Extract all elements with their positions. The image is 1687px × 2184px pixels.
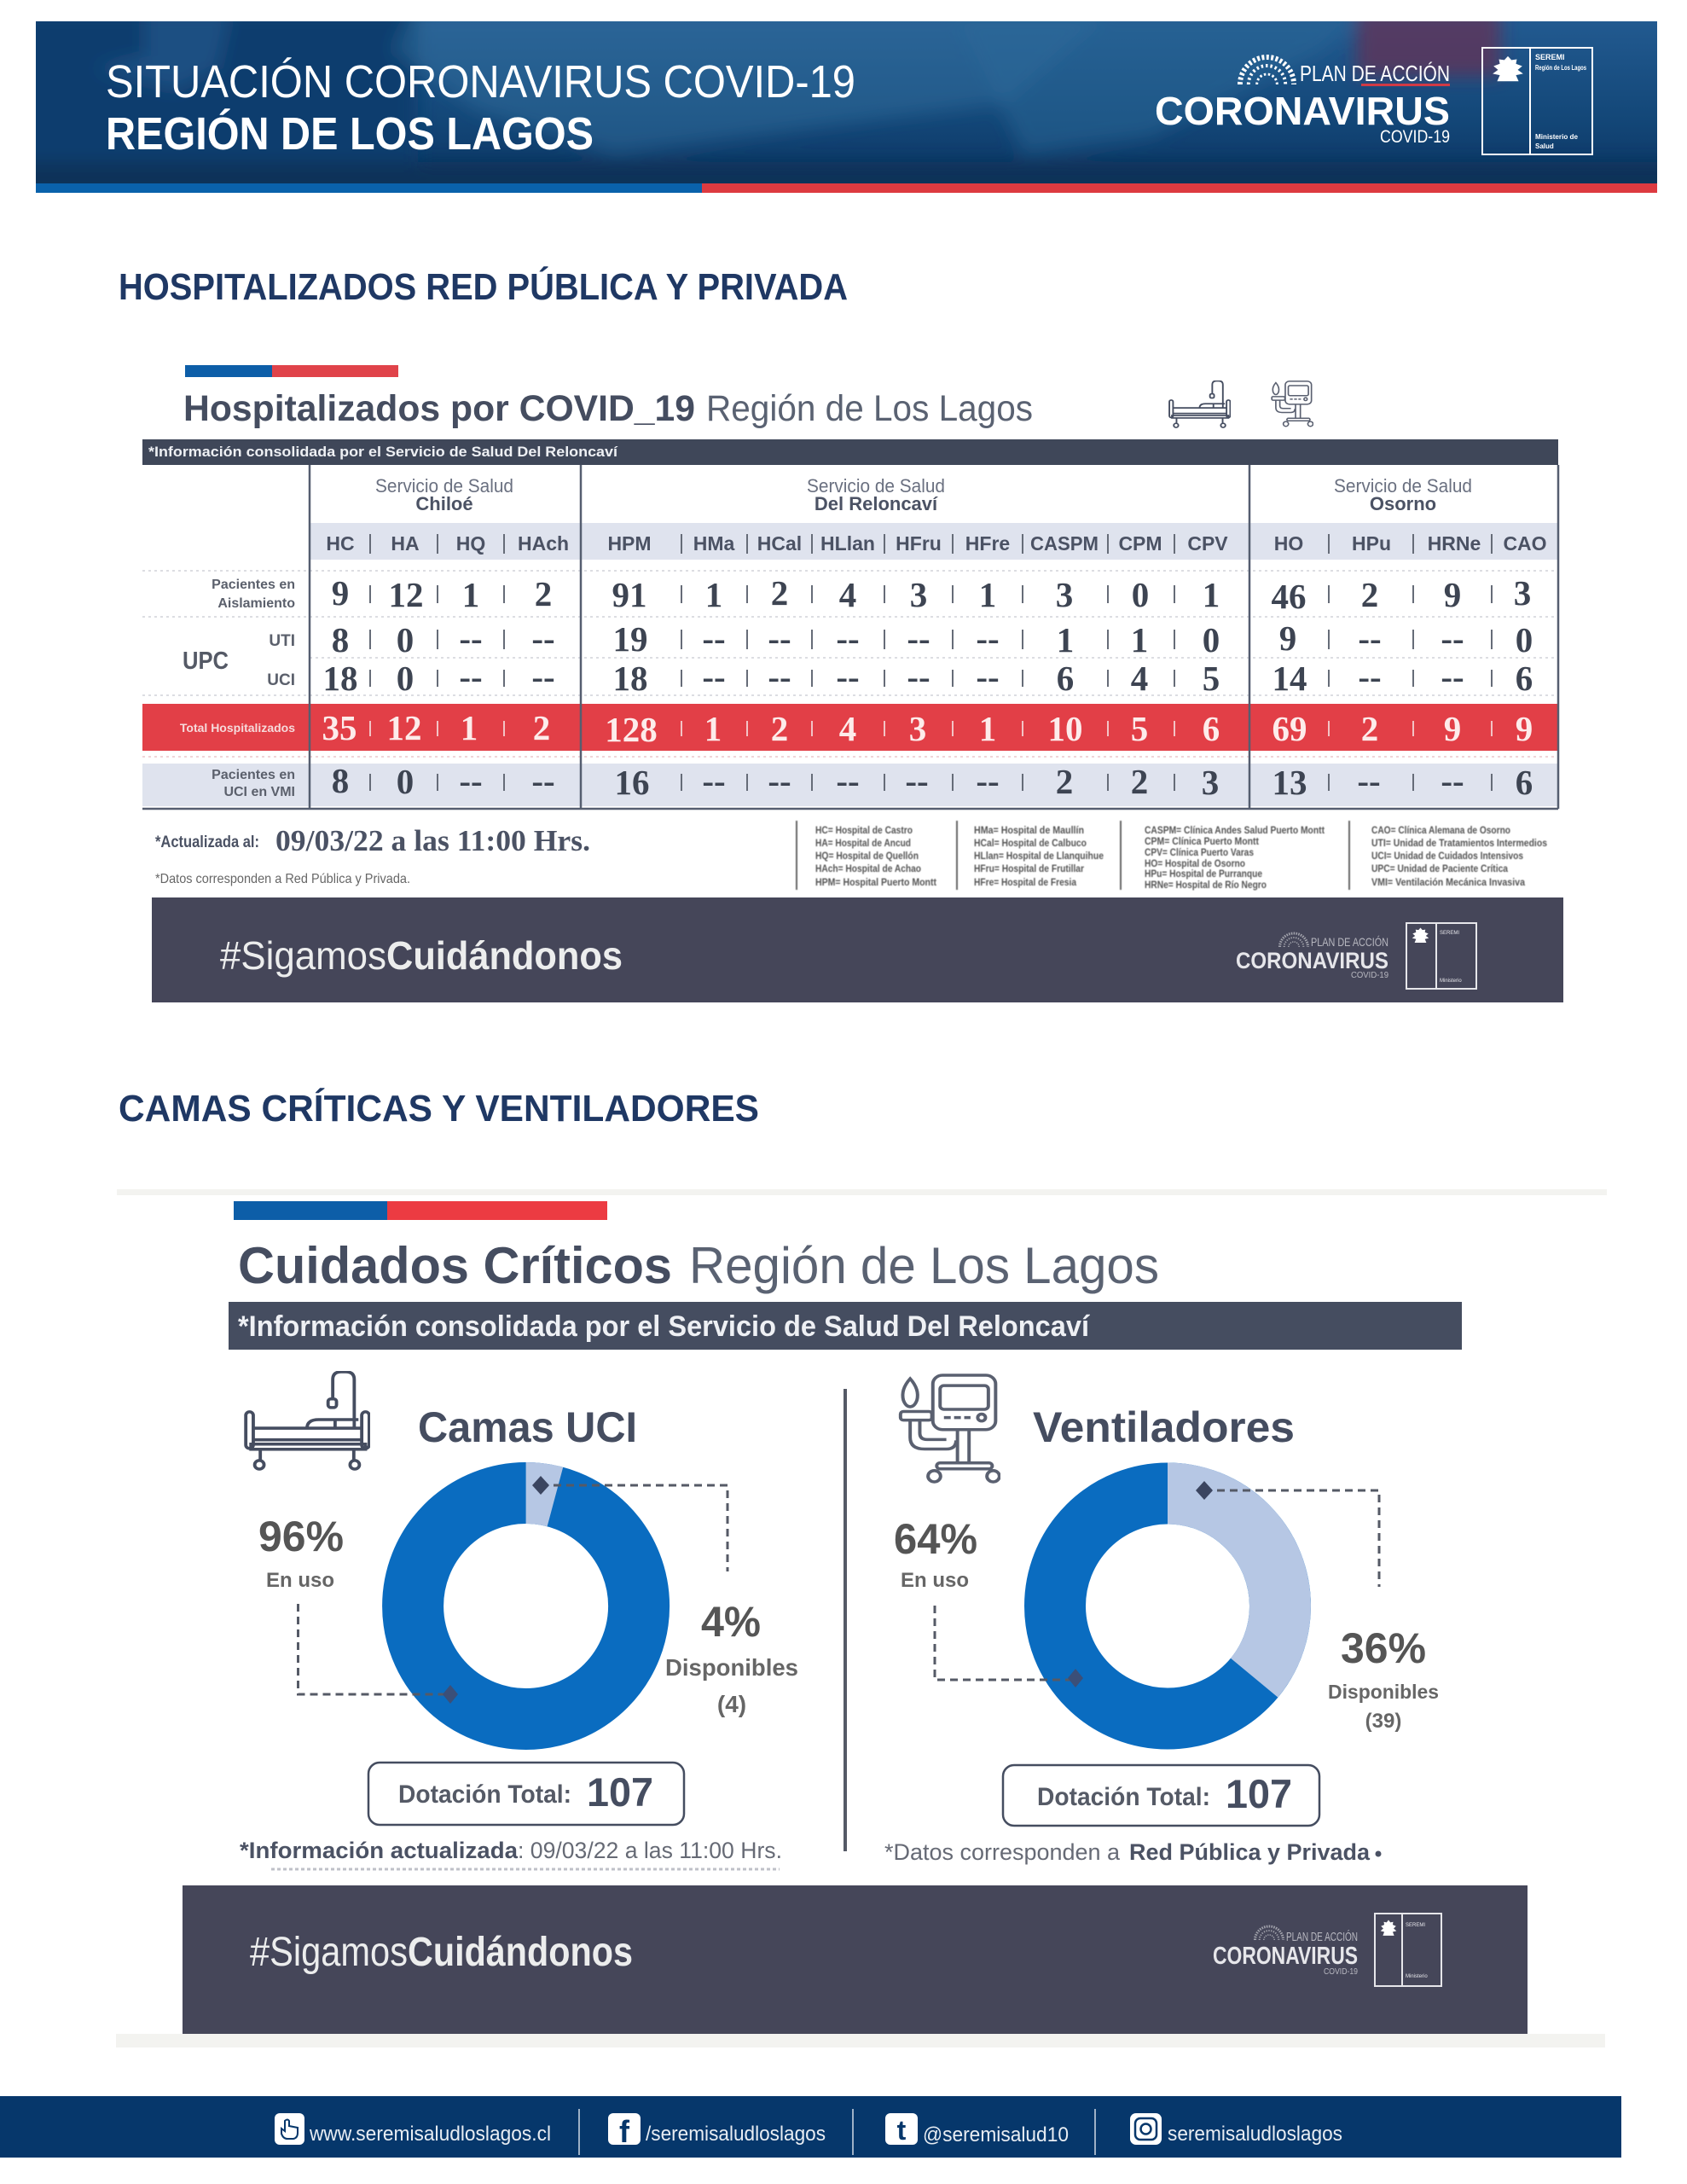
hospital codes	[326, 532, 1547, 555]
update note: *Actualizada al:	[155, 834, 259, 851]
row labels: UCI en VMI	[223, 785, 295, 799]
info bar	[142, 439, 1558, 465]
hashtag banner	[183, 1885, 1528, 2034]
table grid lines	[142, 465, 1558, 809]
row: pacientes en uci en vmi: --	[905, 761, 929, 800]
banner logo: SEREMI	[1406, 1923, 1425, 1928]
hospital codes: CPM	[1118, 532, 1162, 555]
abbreviations legend: HLlan= Hospital de Llanquihue	[974, 850, 1104, 862]
accent stripe	[234, 1201, 607, 1220]
row: pacientes en uci en vmi: --	[459, 761, 483, 800]
total box: 107	[1226, 1771, 1292, 1816]
banner logo: COVID-19	[1324, 1967, 1358, 1977]
banner logo: COVID-19	[1351, 971, 1388, 980]
row: pacientes en aislamiento: 4	[839, 575, 856, 614]
abbreviations legend: HFru= Hospital de Frutillar	[974, 863, 1084, 874]
donut chart: camas uci	[413, 1462, 639, 1719]
row: uti: --	[702, 619, 726, 658]
row: pacientes en aislamiento	[332, 573, 1531, 616]
row: pacientes en aislamiento: 91	[612, 575, 646, 614]
banner logo: Ministerio	[1440, 979, 1462, 984]
row labels: UCI	[267, 671, 295, 689]
callout: en uso: En uso	[901, 1569, 969, 1592]
abbreviations legend: CPV= Clínica Puerto Varas	[1145, 846, 1254, 858]
row: pacientes en uci en vmi: 0	[397, 762, 414, 801]
row: uci: --	[768, 657, 791, 696]
service headers: Del Reloncaví	[815, 493, 938, 514]
row: pacientes en uci en vmi: --	[531, 761, 555, 800]
row: total hospitalizados: 2	[1361, 709, 1378, 748]
row: uti: --	[1358, 619, 1382, 658]
row: uti: 0	[397, 620, 414, 659]
row labels: Aislamiento	[217, 596, 295, 611]
icon: tumblr	[885, 2113, 918, 2146]
row: pacientes en aislamiento: 2	[1361, 575, 1378, 614]
header banner	[36, 21, 1657, 193]
icon: ventilator	[901, 1375, 1000, 1482]
row: pacientes en uci en vmi: 2	[1131, 762, 1148, 801]
panel title	[183, 388, 1033, 429]
row: uci: --	[1358, 657, 1382, 696]
row: total hospitalizados: 1	[461, 708, 478, 747]
icon: instagram	[1130, 2113, 1162, 2145]
row: pacientes en aislamiento: 3	[1056, 575, 1073, 614]
data note: Red Pública y Privada	[1129, 1839, 1371, 1865]
service headers	[375, 475, 1472, 514]
row: total hospitalizados: 5	[1131, 709, 1148, 748]
banner logo: SEREMI	[1440, 931, 1459, 936]
row: pacientes en aislamiento: 1	[1203, 575, 1220, 614]
hospital codes: HA	[391, 532, 420, 555]
tumblr account: @seremisalud10	[923, 2123, 1069, 2146]
update note	[240, 1838, 782, 1863]
heading: ventiladores: Ventiladores	[1033, 1403, 1295, 1451]
abbreviations legend: UTI= Unidad de Tratamientos Intermedios	[1371, 837, 1547, 849]
row: pacientes en aislamiento: 9	[1444, 575, 1461, 614]
row: pacientes en aislamiento: 1	[705, 575, 722, 614]
callout: en uso: 64%	[894, 1515, 977, 1563]
accent stripe	[185, 365, 398, 377]
hashtag banner: Cuidándonos	[408, 1930, 633, 1975]
hospital codes: CPV	[1187, 532, 1228, 555]
info bar	[229, 1302, 1462, 1350]
clipped remnant note line	[271, 1868, 780, 1870]
heading: camas uci: Camas UCI	[418, 1403, 637, 1451]
row: total hospitalizados: 9	[1516, 709, 1533, 748]
row: uci: 6	[1516, 659, 1533, 698]
callout: disponibles: Disponibles	[665, 1654, 798, 1681]
row: total hospitalizados: 4	[839, 709, 856, 748]
service headers: Servicio de Salud	[375, 475, 513, 497]
row labels: UPC	[183, 648, 229, 675]
service headers: Chiloé	[415, 493, 473, 514]
abbreviations legend: HA= Hospital de Ancud	[815, 837, 911, 849]
banner logo: Ministerio	[1406, 1974, 1428, 1979]
row: pacientes en uci en vmi: 3	[1202, 763, 1219, 802]
row: pacientes en aislamiento: 3	[910, 575, 927, 614]
abbreviations legend: HMa= Hospital de Maullín	[974, 824, 1084, 836]
row: uci: 5	[1203, 659, 1220, 698]
banner logo: PLAN DE ACCIÓN	[1286, 1930, 1358, 1944]
data note: *Datos corresponden a	[884, 1839, 1121, 1865]
row: pacientes en aislamiento: 1	[462, 575, 479, 614]
logo: seremi de salud: Ministerio de	[1535, 133, 1579, 141]
logo: plan de acción coronavirus	[1155, 57, 1450, 147]
row: pacientes en aislamiento: 9	[332, 573, 349, 613]
icon: bed	[246, 1372, 369, 1469]
row: pacientes en aislamiento: 46	[1271, 577, 1307, 616]
update note: *Datos corresponden a Red Pública y Privada.	[155, 872, 410, 886]
callout: disponibles: 4%	[701, 1598, 761, 1646]
row: total hospitalizados: 2	[533, 708, 550, 747]
row: uti: --	[1441, 619, 1464, 658]
abbreviations legend: HQ= Hospital de Quellón	[815, 850, 919, 862]
row: uti: --	[531, 619, 555, 658]
hospital codes: HFru	[896, 532, 942, 555]
callout: disponibles	[532, 1476, 798, 1717]
row: pacientes en uci en vmi: 13	[1272, 763, 1307, 802]
header title	[106, 56, 855, 160]
row: uti: --	[459, 619, 483, 658]
hospital codes: HPu	[1352, 532, 1391, 555]
row: uci: --	[836, 657, 860, 696]
hospital codes: HCal	[757, 532, 802, 555]
row: uci: --	[1441, 657, 1464, 696]
row: total hospitalizados: 3	[909, 709, 926, 748]
row: uti: 1	[1131, 620, 1148, 659]
logo: plan de acción coronavirus: PLAN DE ACCIÓN	[1300, 61, 1450, 86]
row: pacientes en aislamiento: 12	[389, 575, 423, 614]
banner logo	[1236, 923, 1476, 989]
section heading: hospitalizados: HOSPITALIZADOS RED PÚBLICA Y PRIVADA	[119, 265, 848, 308]
panel title: Cuidados Críticos	[238, 1237, 672, 1294]
row: pacientes en uci en vmi: --	[1441, 761, 1464, 800]
service headers: Servicio de Salud	[807, 475, 945, 497]
hashtag banner: #Sigamos	[220, 933, 386, 978]
abbreviations legend: HCal= Hospital de Calbuco	[974, 837, 1087, 849]
row: total hospitalizados: 1	[979, 709, 996, 748]
data note	[884, 1839, 1382, 1865]
row: pacientes en uci en vmi: --	[768, 761, 791, 800]
hospital codes: HC	[326, 532, 355, 555]
row: pacientes en uci en vmi: --	[836, 761, 860, 800]
hashtag banner: #Sigamos	[250, 1930, 408, 1975]
icon: facebook	[608, 2113, 641, 2149]
total box: Dotación Total:	[398, 1780, 571, 1809]
row: uti: --	[768, 619, 791, 658]
service headers: Osorno	[1370, 493, 1436, 514]
row: uti: 0	[1516, 620, 1533, 659]
row: uci: --	[459, 657, 483, 696]
icon: web	[275, 2113, 304, 2145]
callout: disponibles: 36%	[1341, 1624, 1426, 1672]
row: total hospitalizados: 69	[1272, 709, 1307, 748]
logo: seremi de salud	[1482, 48, 1592, 154]
hospital codes: HRNe	[1428, 532, 1481, 555]
row: pacientes en uci en vmi: 6	[1516, 763, 1533, 802]
hashtag banner	[152, 897, 1563, 1002]
total box	[368, 1763, 684, 1825]
abbreviations legend: HO= Hospital de Osorno	[1145, 857, 1245, 869]
row: uti: --	[976, 619, 1000, 658]
row: pacientes en aislamiento: 3	[1514, 573, 1531, 613]
row: uti: 9	[1279, 619, 1296, 658]
abbreviations legend	[797, 821, 1547, 891]
abbreviations legend: UCI= Unidad de Cuidados Intensivos	[1371, 850, 1523, 862]
service headers: Servicio de Salud	[1334, 475, 1472, 497]
hospital codes: HO	[1274, 532, 1303, 555]
abbreviations legend: HAch= Hospital de Achao	[815, 863, 921, 874]
row: total hospitalizados: 10	[1047, 709, 1083, 748]
row: pacientes en uci en vmi: --	[1357, 761, 1381, 800]
row: total hospitalizados: 9	[1444, 709, 1461, 748]
row labels: Pacientes en	[212, 578, 295, 592]
hospital codes: HAch	[518, 532, 569, 555]
row: uti: --	[907, 619, 930, 658]
table background bands	[142, 523, 1558, 806]
row: uti: 8	[332, 620, 349, 659]
row: uti: 19	[612, 619, 648, 659]
row: uti: --	[836, 619, 860, 658]
abbreviations legend: HFre= Hospital de Fresia	[974, 876, 1076, 888]
update note: *Información actualizada	[240, 1838, 519, 1863]
row: pacientes en uci en vmi: --	[976, 761, 1000, 800]
panel: cuidados críticos	[116, 1189, 1607, 2048]
hospital codes: CASPM	[1030, 532, 1099, 555]
row: uci: --	[702, 657, 726, 696]
abbreviations legend: CAO= Clínica Alemana de Osorno	[1371, 824, 1510, 836]
row labels: UTI	[269, 632, 295, 650]
row: uci: --	[976, 657, 1000, 696]
row: pacientes en aislamiento: 0	[1132, 575, 1149, 614]
abbreviations legend: VMI= Ventilación Mecánica Invasiva	[1371, 876, 1525, 888]
column divider	[844, 1389, 847, 1851]
logo: plan de acción coronavirus: CORONAVIRUS	[1155, 89, 1450, 133]
callout: disponibles	[1196, 1481, 1439, 1733]
logo: seremi de salud: Región de Los Lagos	[1535, 64, 1586, 72]
row: pacientes en uci en vmi: --	[702, 761, 726, 800]
abbreviations legend: HPu= Hospital de Purranque	[1145, 868, 1262, 880]
row: uci: 6	[1057, 659, 1074, 698]
panel: hospitalizados por covid	[142, 365, 1563, 1002]
hospital codes: HFre	[965, 532, 1010, 555]
logo: plan de acción coronavirus: COVID-19	[1380, 127, 1450, 147]
hospital codes: CAO	[1503, 532, 1547, 555]
callout: en uso	[258, 1513, 458, 1704]
row: uti	[332, 619, 1533, 659]
row: total hospitalizados: 35	[322, 708, 357, 747]
callout: en uso	[894, 1515, 1083, 1687]
footer bar	[0, 2096, 1621, 2158]
callout: disponibles: (4)	[717, 1691, 746, 1717]
logo: seremi de salud: SEREMI	[1535, 53, 1565, 61]
row: total hospitalizados: 12	[387, 708, 421, 747]
row: uci	[322, 657, 1533, 698]
row: uci: 0	[397, 659, 414, 698]
row: pacientes en uci en vmi: 16	[614, 763, 650, 802]
banner logo: PLAN DE ACCIÓN	[1311, 935, 1388, 949]
row: total hospitalizados: 128	[605, 710, 658, 749]
callout: en uso: En uso	[266, 1569, 334, 1592]
banner logo: CORONAVIRUS	[1213, 1943, 1358, 1970]
row: pacientes en uci en vmi	[332, 761, 1533, 802]
panel title: Región de Los Lagos	[689, 1237, 1159, 1294]
row: pacientes en aislamiento: 1	[979, 575, 996, 614]
row: uci: --	[531, 657, 555, 696]
callout: disponibles: (39)	[1365, 1710, 1401, 1733]
row: uti: 1	[1057, 620, 1074, 659]
header red and blue stripe	[36, 183, 1657, 193]
info bar: *Información consolidada por el Servicio de Salud Del Reloncaví	[238, 1310, 1090, 1343]
icon: facebook: f	[619, 2114, 630, 2149]
callout: en uso: 96%	[258, 1513, 344, 1560]
row: total hospitalizados: 2	[771, 709, 788, 748]
row: uci: 14	[1272, 659, 1307, 698]
panel title: Hospitalizados por COVID_19	[183, 388, 695, 429]
row labels	[180, 578, 295, 799]
chart block: camas uci	[240, 1372, 798, 1869]
row labels: Pacientes en	[212, 768, 295, 782]
icon: bed	[1169, 380, 1230, 427]
total box: 107	[587, 1769, 653, 1815]
row: uti: 0	[1203, 620, 1220, 659]
abbreviations legend: HRNe= Hospital de Río Negro	[1145, 879, 1267, 891]
row: uci: 18	[322, 659, 358, 698]
hospital codes: HQ	[456, 532, 485, 555]
abbreviations legend: CPM= Clínica Puerto Montt	[1145, 835, 1259, 847]
row: pacientes en aislamiento: 2	[771, 573, 788, 613]
row: pacientes en uci en vmi: 8	[332, 761, 349, 800]
logo: seremi de salud: Salud	[1535, 142, 1554, 150]
chart block: ventiladores	[884, 1375, 1439, 1865]
hospital codes: HMa	[693, 532, 734, 555]
panel title: Región de Los Lagos	[706, 388, 1033, 429]
row: total hospitalizados: 1	[704, 709, 722, 748]
row: pacientes en aislamiento: 2	[535, 574, 552, 613]
info bar: *Información consolidada por el Servicio de Salud Del Reloncaví	[148, 444, 618, 460]
banner logo: CORONAVIRUS	[1236, 948, 1388, 973]
row: total hospitalizados: 6	[1203, 709, 1220, 748]
abbreviations legend: HC= Hospital de Castro	[815, 824, 913, 836]
abbreviations legend: UPC= Unidad de Paciente Crítica	[1371, 863, 1508, 874]
hospital codes: HPM	[607, 532, 652, 555]
icon: tumblr: t	[897, 2115, 907, 2146]
abbreviations legend: HPM= Hospital Puerto Montt	[815, 876, 936, 888]
hospital codes: HLlan	[820, 532, 875, 555]
hashtag banner: Cuidándonos	[386, 933, 623, 978]
web address: www.seremisaludloslagos.cl	[309, 2123, 551, 2146]
update note	[155, 824, 590, 886]
update note: : 09/03/22 a las 11:00 Hrs.	[518, 1838, 782, 1863]
callout: disponibles: Disponibles	[1328, 1681, 1439, 1703]
row: pacientes en uci en vmi: 2	[1056, 762, 1073, 801]
row: total hospitalizados	[322, 708, 1533, 749]
header title: REGIÓN DE LOS LAGOS	[106, 108, 594, 160]
icon: ventilator	[1272, 381, 1313, 427]
row labels: Total Hospitalizados	[180, 721, 295, 735]
instagram account: seremisaludloslagos	[1168, 2123, 1342, 2146]
total box: Dotación Total:	[1037, 1783, 1210, 1811]
panel title	[238, 1237, 1159, 1294]
section heading: camas críticas: CAMAS CRÍTICAS Y VENTILADORES	[119, 1087, 759, 1130]
abbreviations legend: CASPM= Clínica Andes Salud Puerto Montt	[1145, 824, 1325, 836]
row: uci: 18	[612, 659, 648, 698]
banner logo	[1213, 1914, 1441, 1986]
donut chart: ventiladores	[1055, 1462, 1311, 1718]
row: uci: 4	[1131, 659, 1148, 698]
row: uci: --	[907, 657, 930, 696]
facebook account: /seremisaludloslagos	[646, 2123, 826, 2146]
total box	[1003, 1765, 1319, 1826]
update note: 09/03/22 a las 11:00 Hrs.	[275, 824, 590, 857]
header title: SITUACIÓN CORONAVIRUS COVID-19	[106, 56, 855, 107]
